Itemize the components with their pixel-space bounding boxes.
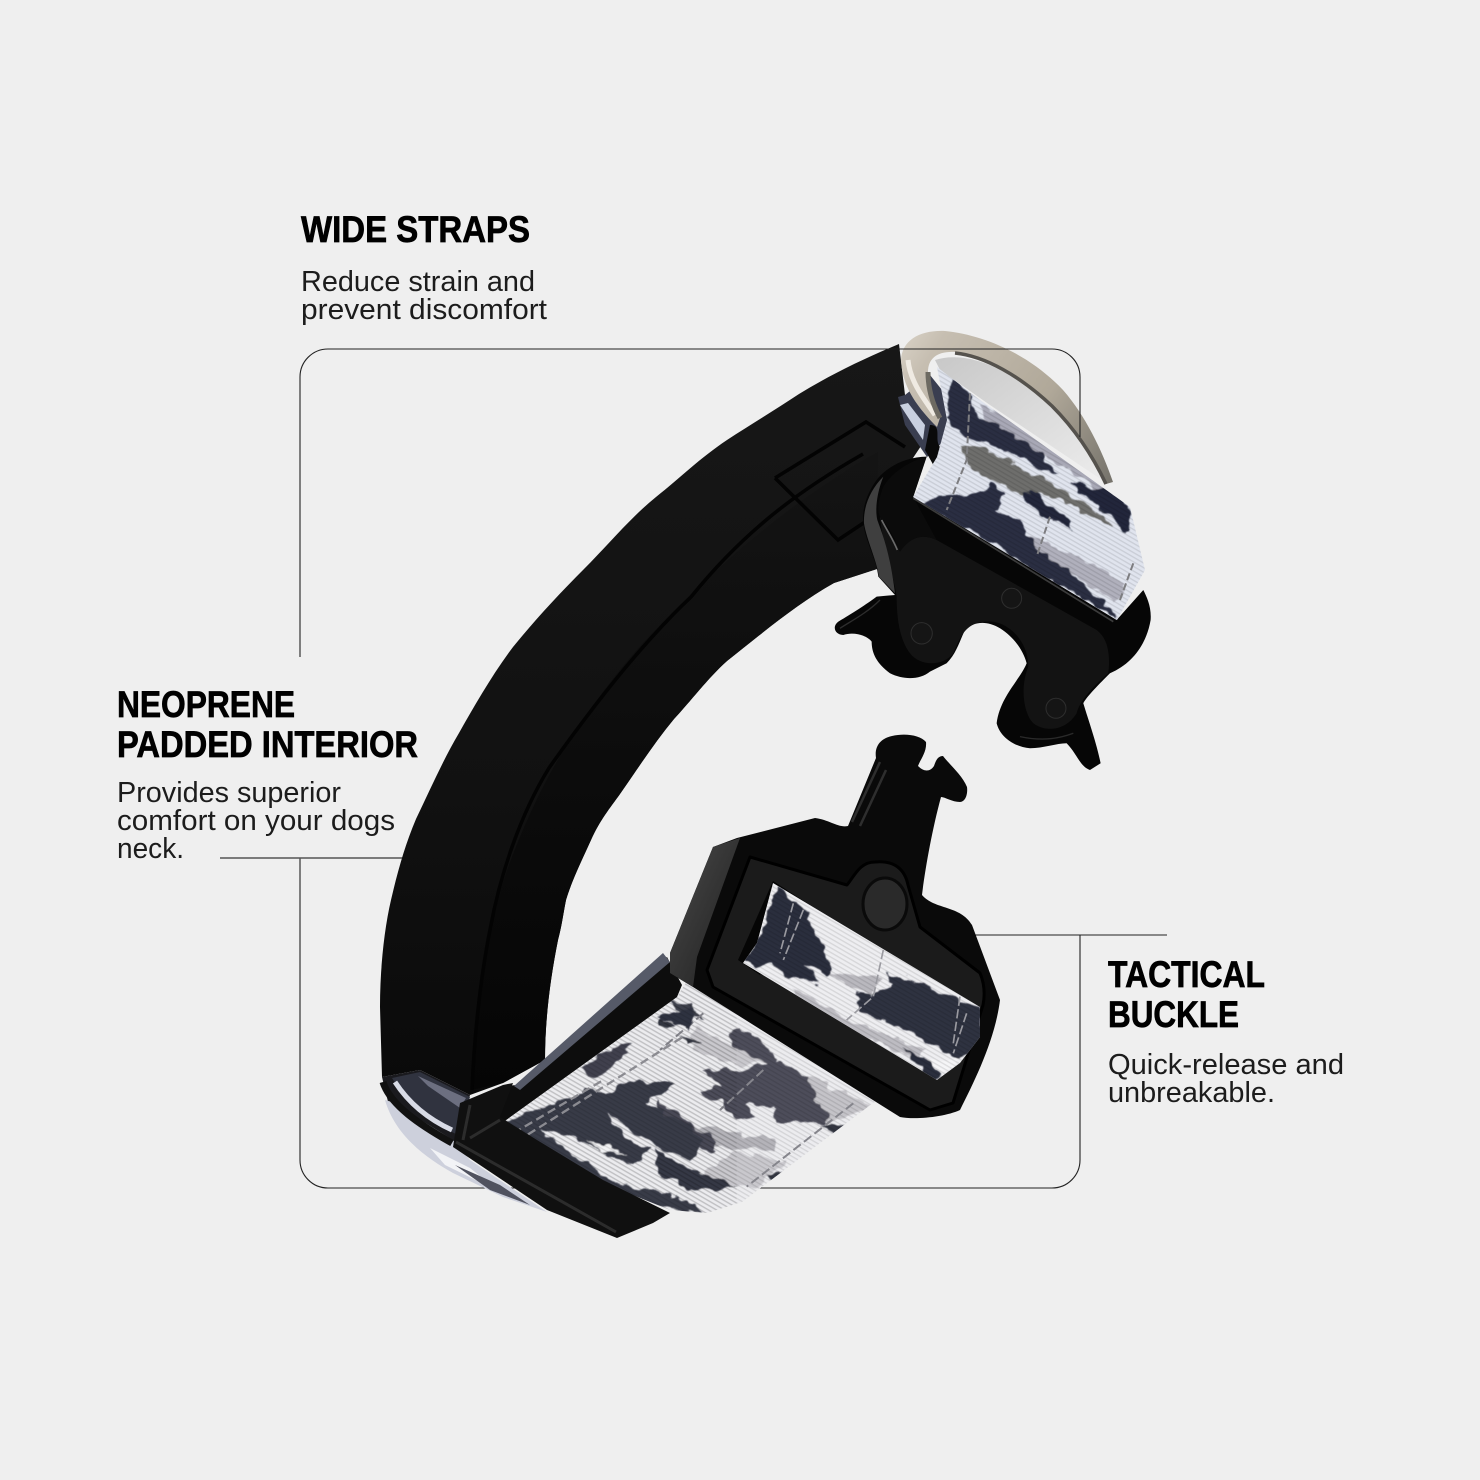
description: Provides superior [117,777,342,809]
ring body [901,331,1113,484]
elastic keeper loop [453,1083,670,1238]
heading [1108,954,1265,1035]
description [301,266,547,326]
strap speckled edge [514,953,670,1090]
description: neck. [117,833,184,865]
frame: upper outline over collar [300,349,1080,657]
buckle window strap [743,883,980,1080]
neoprene padded band [380,344,925,1095]
ring highlight [908,360,935,415]
button [863,878,907,930]
frame: lower outline behind collar [220,858,1167,1188]
description: Quick-release and [1108,1049,1344,1081]
ring inner reflection [935,357,1105,482]
d-ring [901,331,1113,484]
heading [117,684,418,765]
heading: WIDE STRAPS [301,209,530,250]
lower camo strap: back flap [382,1070,547,1212]
buckle edge highlight [864,477,895,593]
tactical buckle: upper half [835,457,1151,770]
description [1108,1049,1344,1109]
centre crease and velcro patch [472,422,905,1090]
buckle tab ridges [852,762,886,826]
buckle recess [707,857,984,1110]
buckle top lobe [878,457,937,552]
strap window hole [738,881,810,975]
elastic fold [925,425,945,468]
description: prevent discomfort [301,294,547,326]
heading: PADDED INTERIOR [117,724,418,765]
buckle side face [670,838,740,987]
callout: tactical buckle [1108,954,1344,1109]
description [117,777,395,865]
description: unbreakable. [1108,1077,1275,1109]
collar illustration [380,331,1180,1240]
ring lower shade [928,372,940,418]
rivets [911,588,1066,718]
heading: NEOPRENE [117,684,295,725]
callout: neoprene padded interior [117,684,418,865]
buckle body [670,735,1000,1118]
strap slit edge [913,498,1113,622]
upper camo strap [898,368,1145,620]
heading: TACTICAL [1108,954,1265,995]
callout: wide straps [301,209,547,326]
description: comfort on your dogs [117,805,395,837]
ring inner shadow [955,353,1106,484]
description: Reduce strain and [301,266,535,298]
strap black edge binding [495,957,682,1123]
upper buckle shell [835,457,1151,770]
tactical buckle: lower half [670,735,1000,1118]
lower camo strap: front webbing [500,953,875,1213]
upper buckle plate [880,517,1109,729]
inner liner shading [472,452,878,1090]
heading: BUCKLE [1108,994,1239,1035]
webbing behind ring [898,375,950,457]
